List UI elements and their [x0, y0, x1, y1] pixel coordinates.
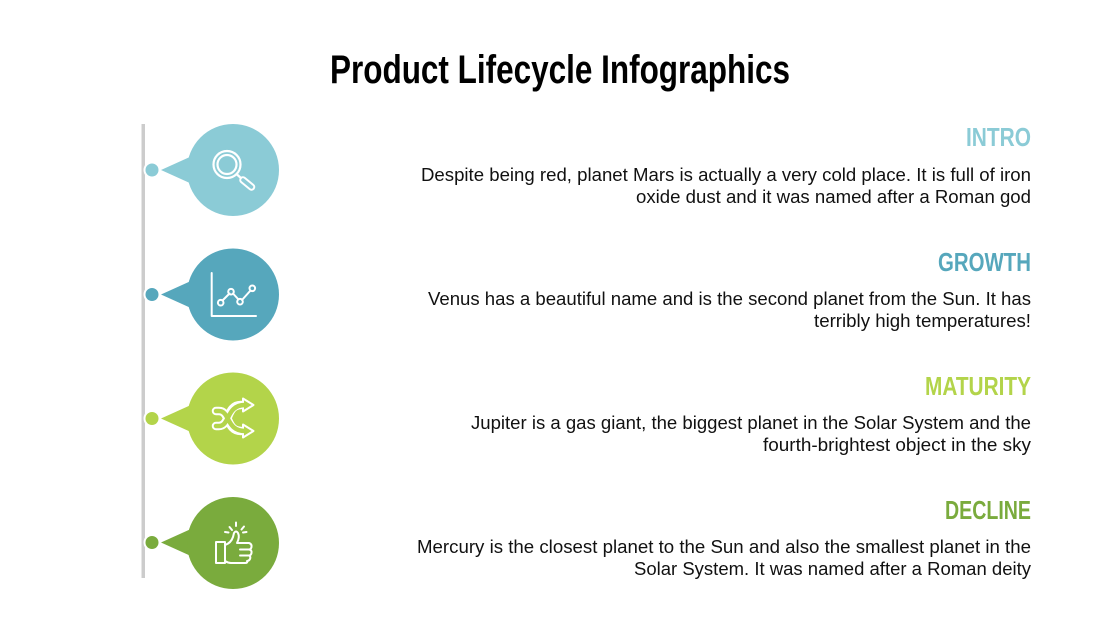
stage: maturity marker: [144, 372, 279, 464]
text block: growth: Venus has a beautiful name and is the second planet from the Sun. It has: [428, 289, 1031, 309]
icon: shuffle arrows: [216, 398, 254, 438]
icon: thumbs up: [216, 522, 252, 563]
text block: maturity: fourth-brightest object in the sky: [763, 435, 1031, 455]
title: Product Lifecycle Infographics: [330, 48, 790, 92]
text block: maturity: [471, 413, 1031, 455]
heading: decline: DECLINE: [945, 495, 1031, 525]
heading: intro: INTRO: [966, 122, 1031, 152]
text block: intro: [421, 165, 1031, 207]
text block: intro: Despite being red, planet Mars is actually a very cold place. It is full of iron: [421, 165, 1031, 185]
heading: maturity: MATURITY: [925, 371, 1031, 401]
icon: line chart: [212, 273, 256, 316]
text block: intro: oxide dust and it was named after a Roman god: [636, 187, 1031, 207]
stage: intro marker: [144, 124, 279, 216]
text block: growth: [428, 289, 1031, 331]
stage: decline marker: [144, 497, 279, 589]
text block: decline: Mercury is the closest planet to the Sun and also the smallest planet in the: [417, 537, 1031, 557]
icon: magnifying glass: [214, 151, 252, 187]
text block: growth: terribly high temperatures!: [814, 311, 1031, 331]
text block: decline: Solar System. It was named after a Roman deity: [634, 559, 1031, 579]
text block: maturity: Jupiter is a gas giant, the biggest planet in the Solar System and the: [471, 413, 1031, 433]
timeline vertical line: [142, 124, 145, 578]
heading: growth: GROWTH: [938, 247, 1031, 277]
stage: growth marker: [144, 248, 279, 340]
text block: decline: [417, 537, 1031, 579]
